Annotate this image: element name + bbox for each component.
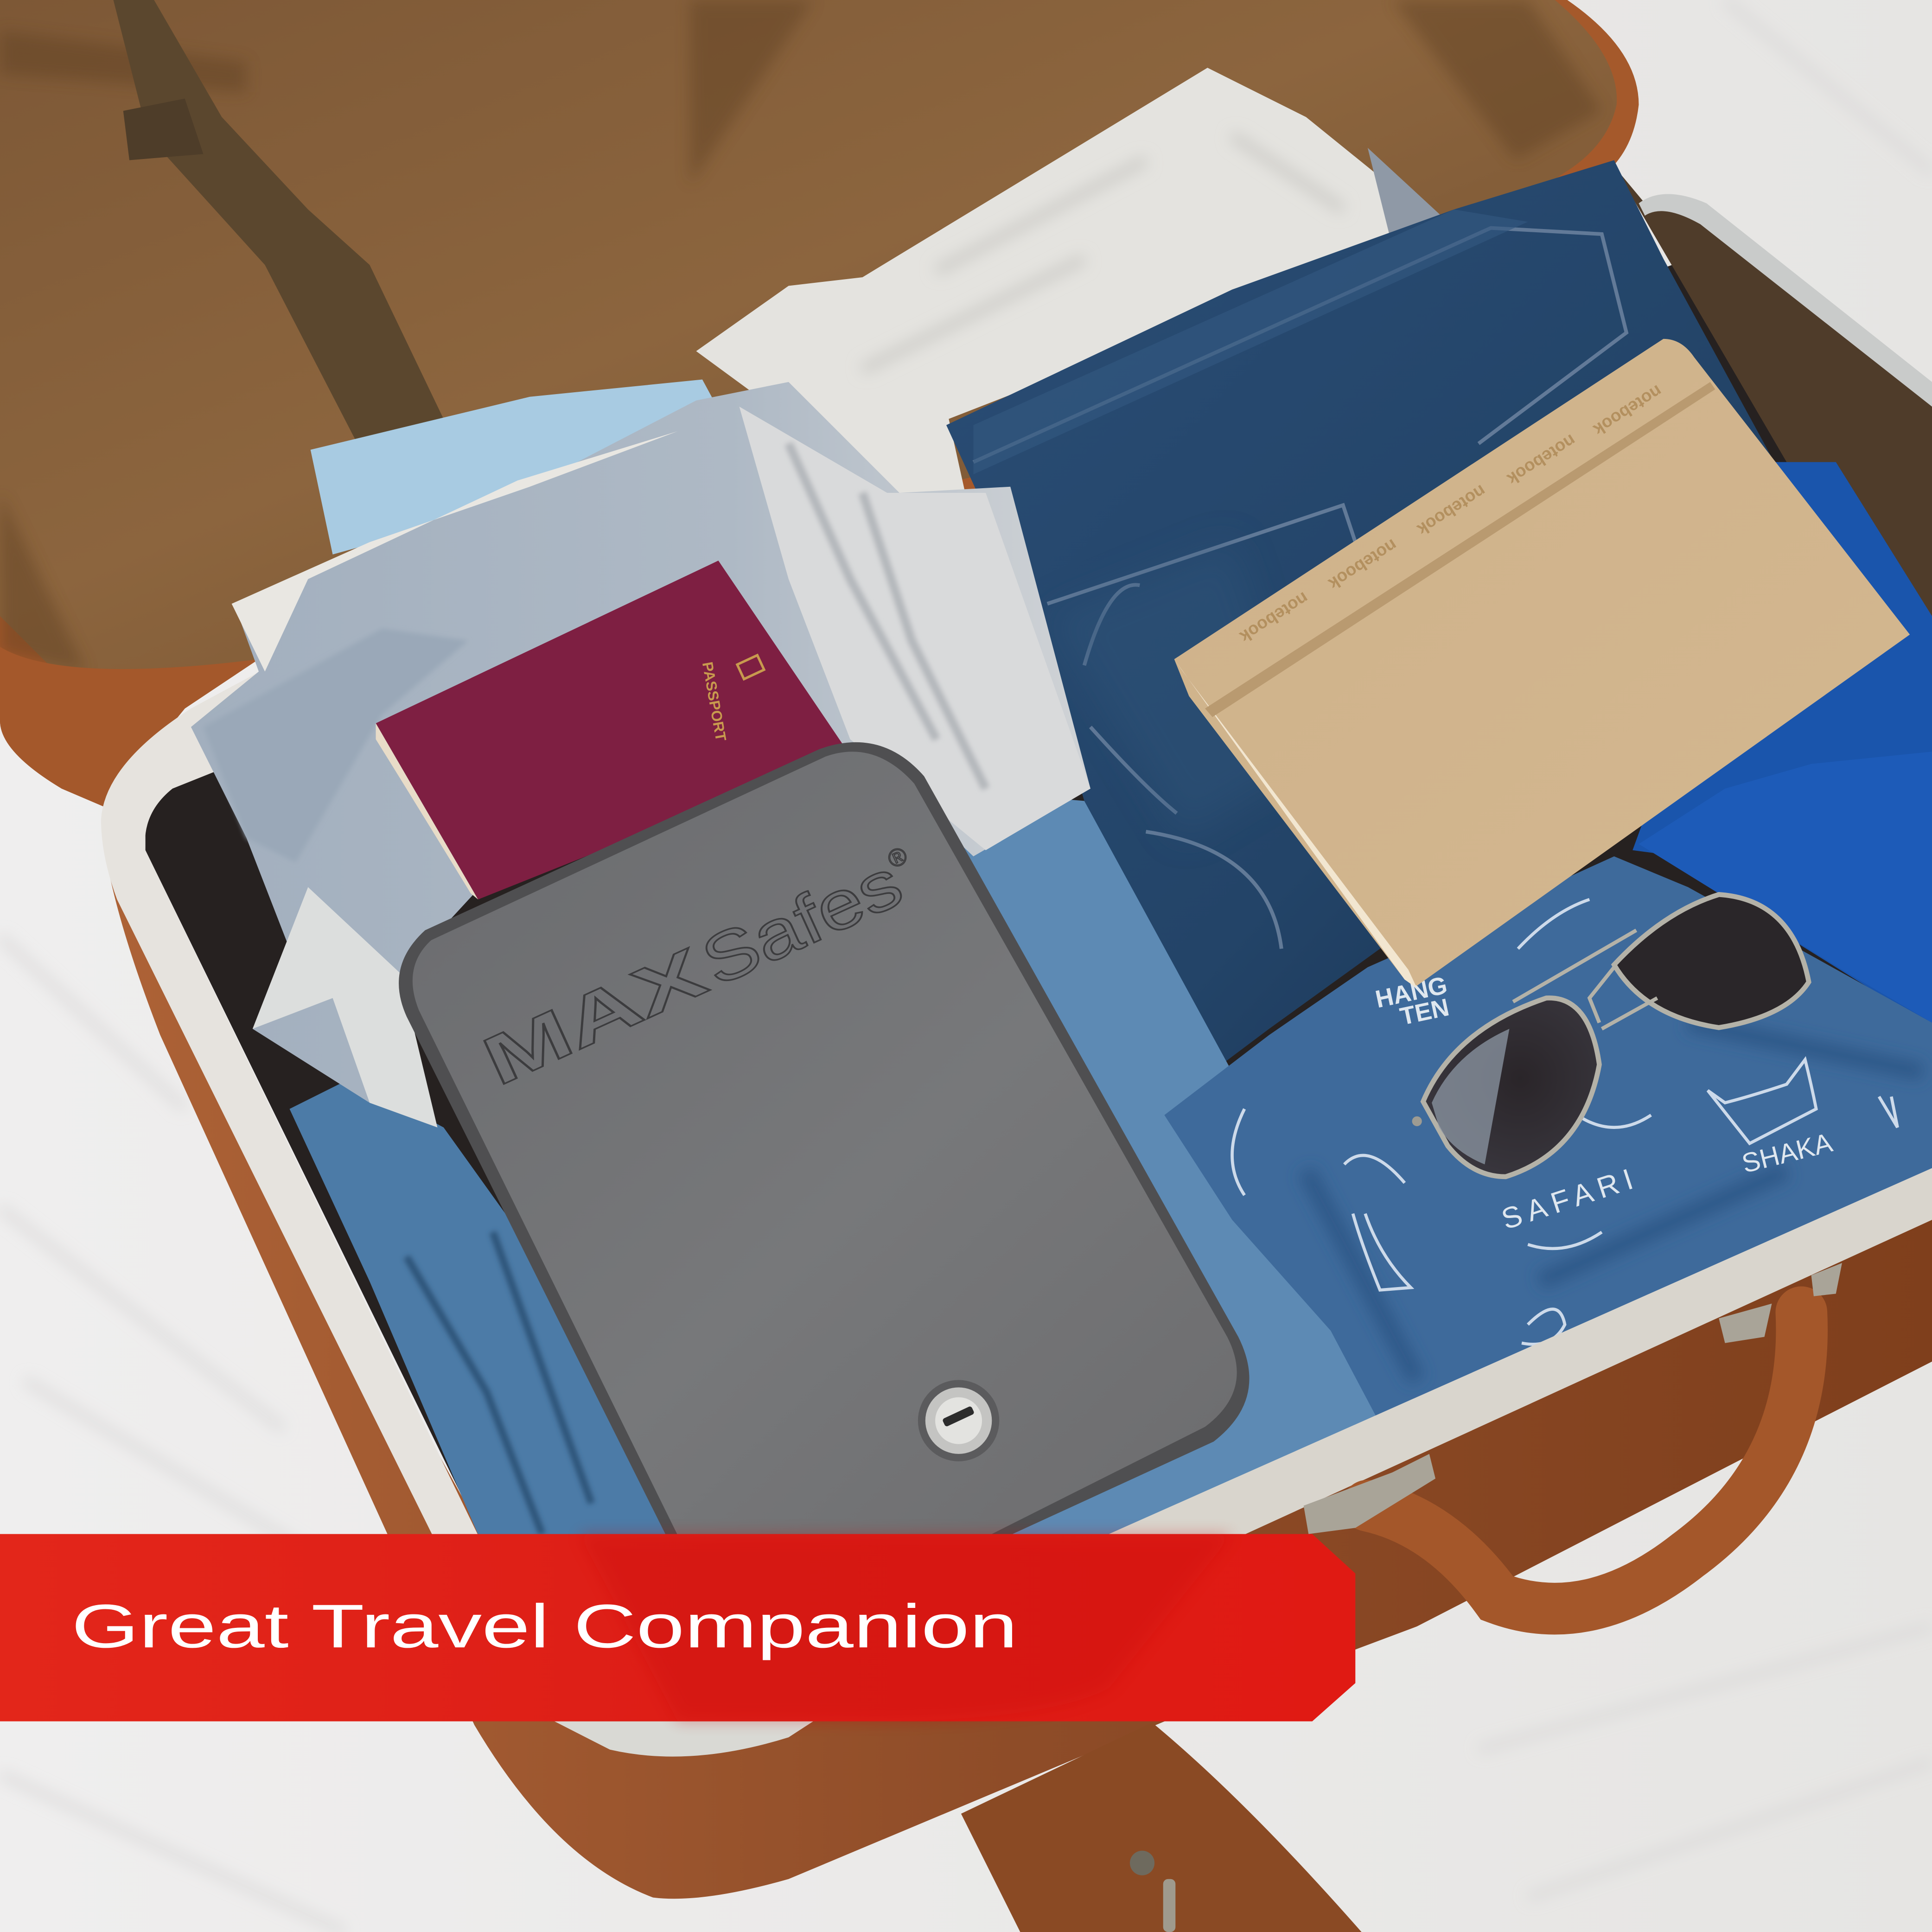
dark denim jeans	[946, 160, 1774, 1066]
suitcase base leather	[105, 850, 1932, 1899]
shirt print lettering	[1373, 971, 1835, 1236]
safe brand logo: MAX	[472, 933, 717, 1100]
light denim jeans under safe	[290, 789, 1392, 1540]
notebook band lettering: notebook	[1414, 481, 1490, 540]
shirt print lettering: SHAKA	[1739, 1128, 1835, 1179]
suitcase dark interior	[146, 247, 1932, 1534]
shirt folds	[1306, 1023, 1922, 1380]
luggage strap	[961, 1722, 1362, 1932]
safe brand logo	[472, 836, 930, 1100]
suitcase handle	[1304, 1263, 1842, 1609]
notebook band lettering: notebook	[1325, 536, 1401, 594]
notebook	[1174, 339, 1910, 988]
royal blue shirt	[1632, 462, 1932, 1035]
safe brand logo: Safes	[690, 843, 913, 1001]
strap buckle	[1130, 1851, 1175, 1932]
lid lining shading	[0, 0, 1602, 671]
blue printed shirt	[1164, 856, 1932, 1435]
lid elastic strap	[113, 0, 444, 444]
lid leather rim lower left	[0, 647, 259, 807]
grey-blue folded shirt	[191, 382, 1090, 1128]
shirt print doodles	[1232, 899, 1898, 1344]
banner heading: Great Travel Companion	[71, 1592, 1018, 1661]
notebook band lettering: notebook	[1237, 588, 1312, 647]
sunglasses	[1412, 894, 1809, 1177]
suitcase lid	[0, 0, 1639, 807]
aluminium rim left and top	[101, 194, 1932, 1757]
lid fabric lining	[0, 0, 1617, 673]
shirt print lettering: HANG	[1373, 971, 1450, 1014]
shirt print lettering: SAFARI	[1498, 1160, 1643, 1236]
safe brand logo: ®	[884, 842, 912, 874]
light shirt folds	[740, 407, 1090, 850]
banner ghost tint	[579, 1534, 1232, 1722]
notebook page edge	[1174, 659, 1417, 988]
notebook elastic band	[1205, 382, 1715, 717]
notebook band lettering: notebook	[1590, 381, 1666, 440]
passport chip icon	[737, 655, 764, 679]
jeans waistband and pocket	[973, 228, 1626, 949]
right lid lining	[1614, 166, 1932, 641]
notebook band lettering	[1237, 381, 1666, 647]
safe	[399, 742, 1250, 1546]
red banner	[0, 1534, 1355, 1722]
pale blue shirt	[311, 380, 727, 555]
shirt print lettering: TEN	[1397, 994, 1452, 1031]
passport	[376, 561, 848, 899]
white shirt	[696, 68, 1448, 530]
notebook band lettering: notebook	[1504, 431, 1580, 489]
passport label: PASSPORT	[699, 661, 729, 743]
aluminium rim front	[1109, 1168, 1932, 1540]
safe lid face	[413, 752, 1237, 1540]
key lock	[918, 1380, 999, 1461]
white sleeve	[232, 431, 678, 671]
handle brackets	[1304, 1263, 1842, 1534]
white shirt shading	[862, 135, 1343, 370]
lower left denim	[290, 1078, 740, 1540]
